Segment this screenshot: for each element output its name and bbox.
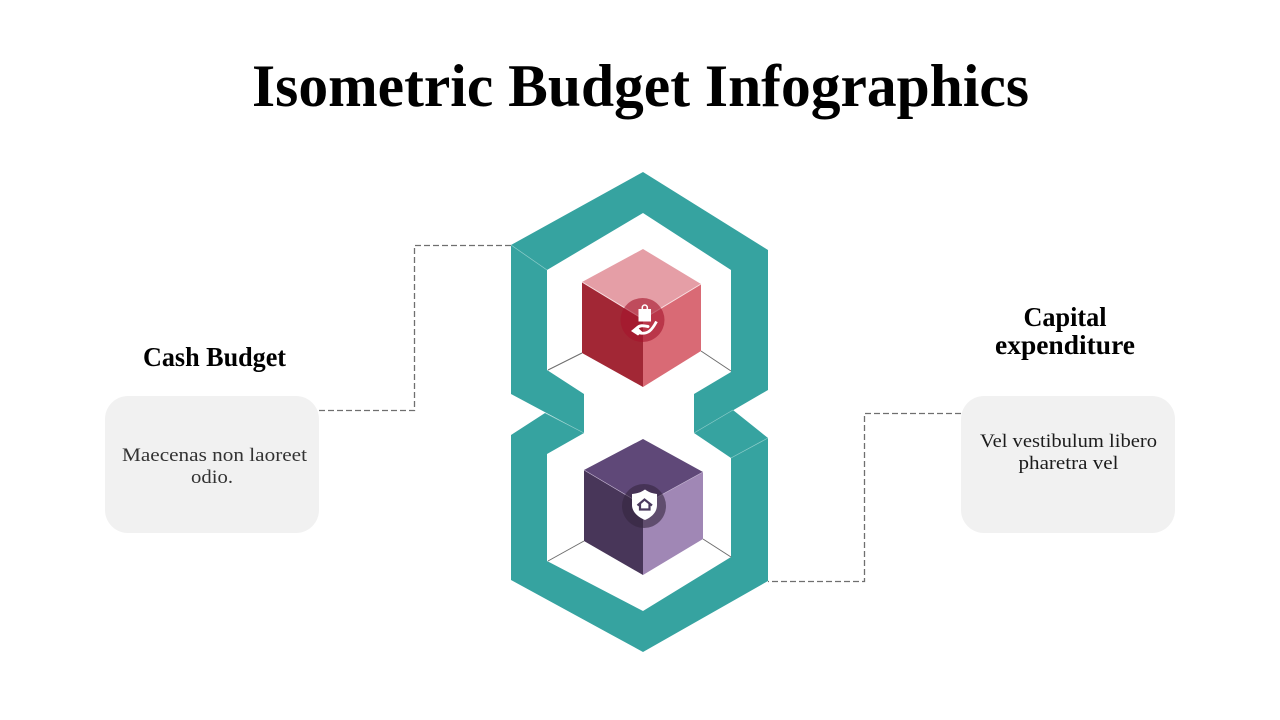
guide lines: red cube	[548, 351, 731, 371]
panel: capital expenditure text box	[961, 396, 1175, 533]
title: Isometric Budget Infographics	[252, 53, 1029, 119]
cube: red	[582, 249, 701, 387]
guide lines: purple cube	[548, 539, 731, 561]
text block: cash budget	[122, 446, 308, 488]
text block: capital expenditure	[980, 432, 1157, 474]
connector: capital expenditure	[768, 414, 961, 582]
heading: capital expenditure: Capital	[1024, 302, 1107, 332]
panel: cash budget text box	[105, 396, 319, 533]
text block: capital expenditure: Vel vestibulum libero	[980, 432, 1157, 452]
heading: capital expenditure: expenditure	[995, 330, 1135, 360]
frame: lower right tab	[694, 410, 768, 458]
icon: hand holding bag	[620, 298, 664, 342]
text block: cash budget: Maecenas non laoreet	[122, 446, 308, 466]
isometric frame	[511, 172, 768, 652]
icon: shield with house	[622, 484, 666, 528]
connector: cash budget	[318, 246, 511, 410]
cube: purple	[584, 439, 703, 575]
frame: upper hexagon	[511, 172, 768, 433]
text block: cash budget: odio.	[191, 468, 233, 488]
heading: cash budget: Cash Budget	[143, 342, 286, 372]
frame seams	[511, 245, 768, 458]
frame: lower hexagon	[511, 413, 768, 652]
text block: capital expenditure: pharetra vel	[1018, 454, 1118, 474]
heading: capital expenditure	[995, 302, 1135, 360]
